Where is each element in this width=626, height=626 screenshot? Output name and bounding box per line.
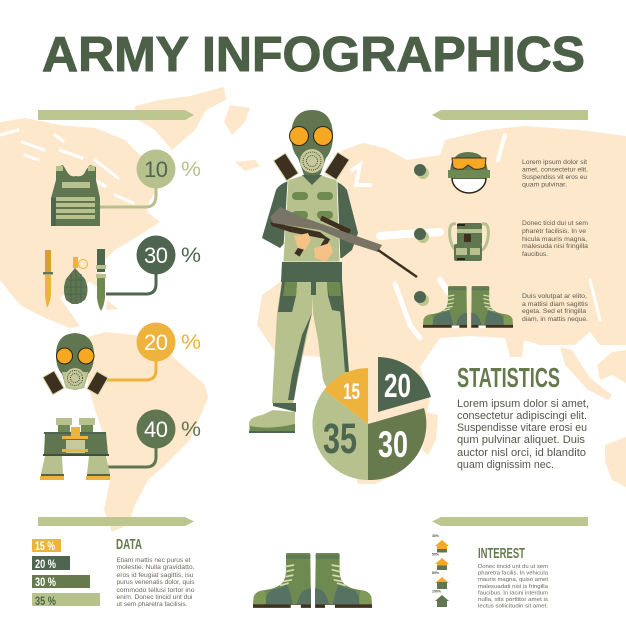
connector 40 — [108, 445, 156, 467]
arms — [262, 180, 292, 248]
text block: interest: Donec tincid unt du ut sem — [478, 564, 548, 570]
marker dots — [414, 164, 429, 306]
text block: backpack: Donec ticid dui ut sem — [522, 220, 588, 227]
bar chart: data — [32, 539, 100, 608]
chart: interest houses: 80% — [432, 571, 440, 575]
text block: boots: egeta. Sed et fringilla — [522, 308, 586, 315]
text block: boots: a mattisi diam sagittis — [522, 301, 588, 308]
arrow: bottom left — [38, 517, 194, 526]
text block: helmet: amet, consectetur elit. — [522, 166, 588, 174]
text block: data: Etiam mattis nec purus et — [116, 557, 191, 564]
text block: helmet: Lorem ipsum dolor sit — [522, 159, 587, 166]
left leg — [272, 280, 314, 403]
filter — [300, 149, 324, 173]
icon: sheathed knife — [96, 249, 106, 311]
bubble 20 percent: % — [181, 331, 201, 354]
hands — [294, 233, 311, 250]
icon: knife — [43, 250, 53, 308]
text block: interest: malesuadati nisi is fringilla — [478, 584, 549, 590]
text block: helmet: quam pulvinar. — [522, 182, 567, 188]
boots: bottom center — [253, 553, 372, 609]
text block: statistics: quam dignissim nec. — [457, 459, 554, 471]
text block: data: purus venenatis dolor, quis — [116, 579, 194, 586]
text block: data: ut sem pharetra facilisis. — [116, 601, 188, 608]
text block: data — [116, 557, 195, 608]
icon: backpack — [450, 223, 488, 261]
text block: statistics — [457, 398, 589, 471]
boot — [249, 410, 295, 432]
pockets — [278, 282, 297, 312]
bar chart: data: 35 % — [35, 594, 56, 608]
icon: grenade — [64, 257, 88, 304]
text block: backpack: hicula mauris magna, — [522, 236, 587, 243]
text block: boots: diam, in mattis neque. — [522, 316, 588, 323]
heading: interest: INTEREST — [478, 545, 525, 562]
belt — [281, 262, 342, 282]
pie chart: 20 — [384, 367, 411, 404]
text block: data: molestie. Nulla gravidatto, — [116, 564, 195, 571]
right leg — [313, 280, 347, 395]
map sea gaps — [0, 130, 600, 338]
text block: interest: nulla, sits porttitor amet is — [478, 597, 548, 603]
chart: interest houses: 30% — [432, 534, 440, 538]
arrow: bottom right — [432, 517, 588, 526]
icon: soldier — [249, 110, 417, 433]
text block: backpack: pharetr facilisis. In ve — [522, 228, 586, 235]
text block: backpack — [522, 220, 588, 258]
connector 10 — [100, 185, 156, 207]
arrow: top right — [432, 110, 588, 120]
icon: binoculars — [40, 418, 110, 480]
text block: statistics: consectetur adipiscingi elit. — [457, 410, 587, 422]
hood — [291, 110, 333, 175]
text block: interest: faucibus. In lacini interdum — [478, 590, 548, 596]
icon: boots pair right — [423, 286, 513, 328]
chart: interest houses — [432, 534, 449, 607]
connector 30 — [106, 270, 156, 294]
text block: helmet: Suspendiss vit eros eu — [522, 174, 587, 181]
pie chart: 15 — [343, 379, 360, 404]
panel: left percentages — [100, 150, 201, 467]
title: ARMY INFOGRAPHICS — [42, 28, 585, 82]
text block: boots: Duis volutpat ar elito, — [522, 293, 587, 300]
connector 20 — [106, 358, 156, 380]
arrow: top left — [38, 110, 194, 120]
pie chart: 30 — [378, 424, 408, 465]
bubble 20 percent — [136, 322, 201, 362]
bubble 30 percent: 30 — [144, 243, 168, 268]
bar chart: data: 30 % — [35, 575, 56, 589]
canisters — [274, 153, 298, 181]
bubble 40 percent: 40 — [144, 417, 168, 442]
pie chart — [312, 357, 431, 480]
text block: interest: lectus sollicitudin sit amet. — [478, 604, 549, 610]
text block: helmet — [522, 159, 588, 188]
rifle — [270, 222, 330, 240]
vest — [283, 174, 340, 262]
heading: data: DATA — [116, 536, 142, 553]
text block: backpack: faucibus. — [522, 251, 548, 258]
chart: interest houses: 100% — [432, 590, 442, 594]
bubble 30 percent: % — [181, 244, 201, 267]
bubble 40 percent: % — [181, 418, 201, 441]
world map — [0, 87, 626, 532]
icon: armor vest — [51, 165, 100, 226]
bubble 10 percent — [136, 150, 201, 188]
text block: interest: pharetra facilis. In vehicula — [478, 570, 549, 576]
text block: backpack: malesuda nisi fringilla — [522, 243, 588, 250]
icon: helmet — [448, 152, 490, 193]
text block: data: enim. Donec tincid unt dui — [116, 594, 192, 601]
text block: statistics: auctor nisl orci, id blandito — [457, 447, 586, 459]
pie chart: 35 — [323, 415, 357, 463]
text block: data: eros id feugiat sagittis, isu — [116, 572, 194, 579]
text block: interest: mauris magna, quiso amet — [478, 577, 549, 583]
bar chart: data: 20 % — [35, 557, 56, 571]
text block: interest — [478, 564, 549, 610]
heading: statistics: STATISTICS — [457, 362, 560, 393]
bar chart: data: 15 % — [35, 539, 55, 553]
bubble 20 percent: 20 — [144, 330, 168, 355]
text block: data: commodo tellusi tortor ino — [116, 587, 195, 594]
bubble 10 percent: % — [181, 158, 201, 181]
text block: boots — [522, 293, 588, 323]
eyes — [290, 126, 308, 146]
icon: gas mask — [43, 333, 108, 395]
text block: statistics: Suspendisse vitare erosi eu — [457, 422, 587, 434]
chart: interest houses: 50% — [432, 552, 440, 556]
bubble 30 percent — [136, 236, 201, 274]
bubble 40 percent — [136, 410, 201, 448]
text block: statistics: qum pulvinar aliquet. Duis — [457, 434, 585, 446]
text block: statistics: Lorem ipsum dolor si amet, — [457, 398, 589, 410]
bubble 10 percent: 10 — [144, 157, 168, 182]
